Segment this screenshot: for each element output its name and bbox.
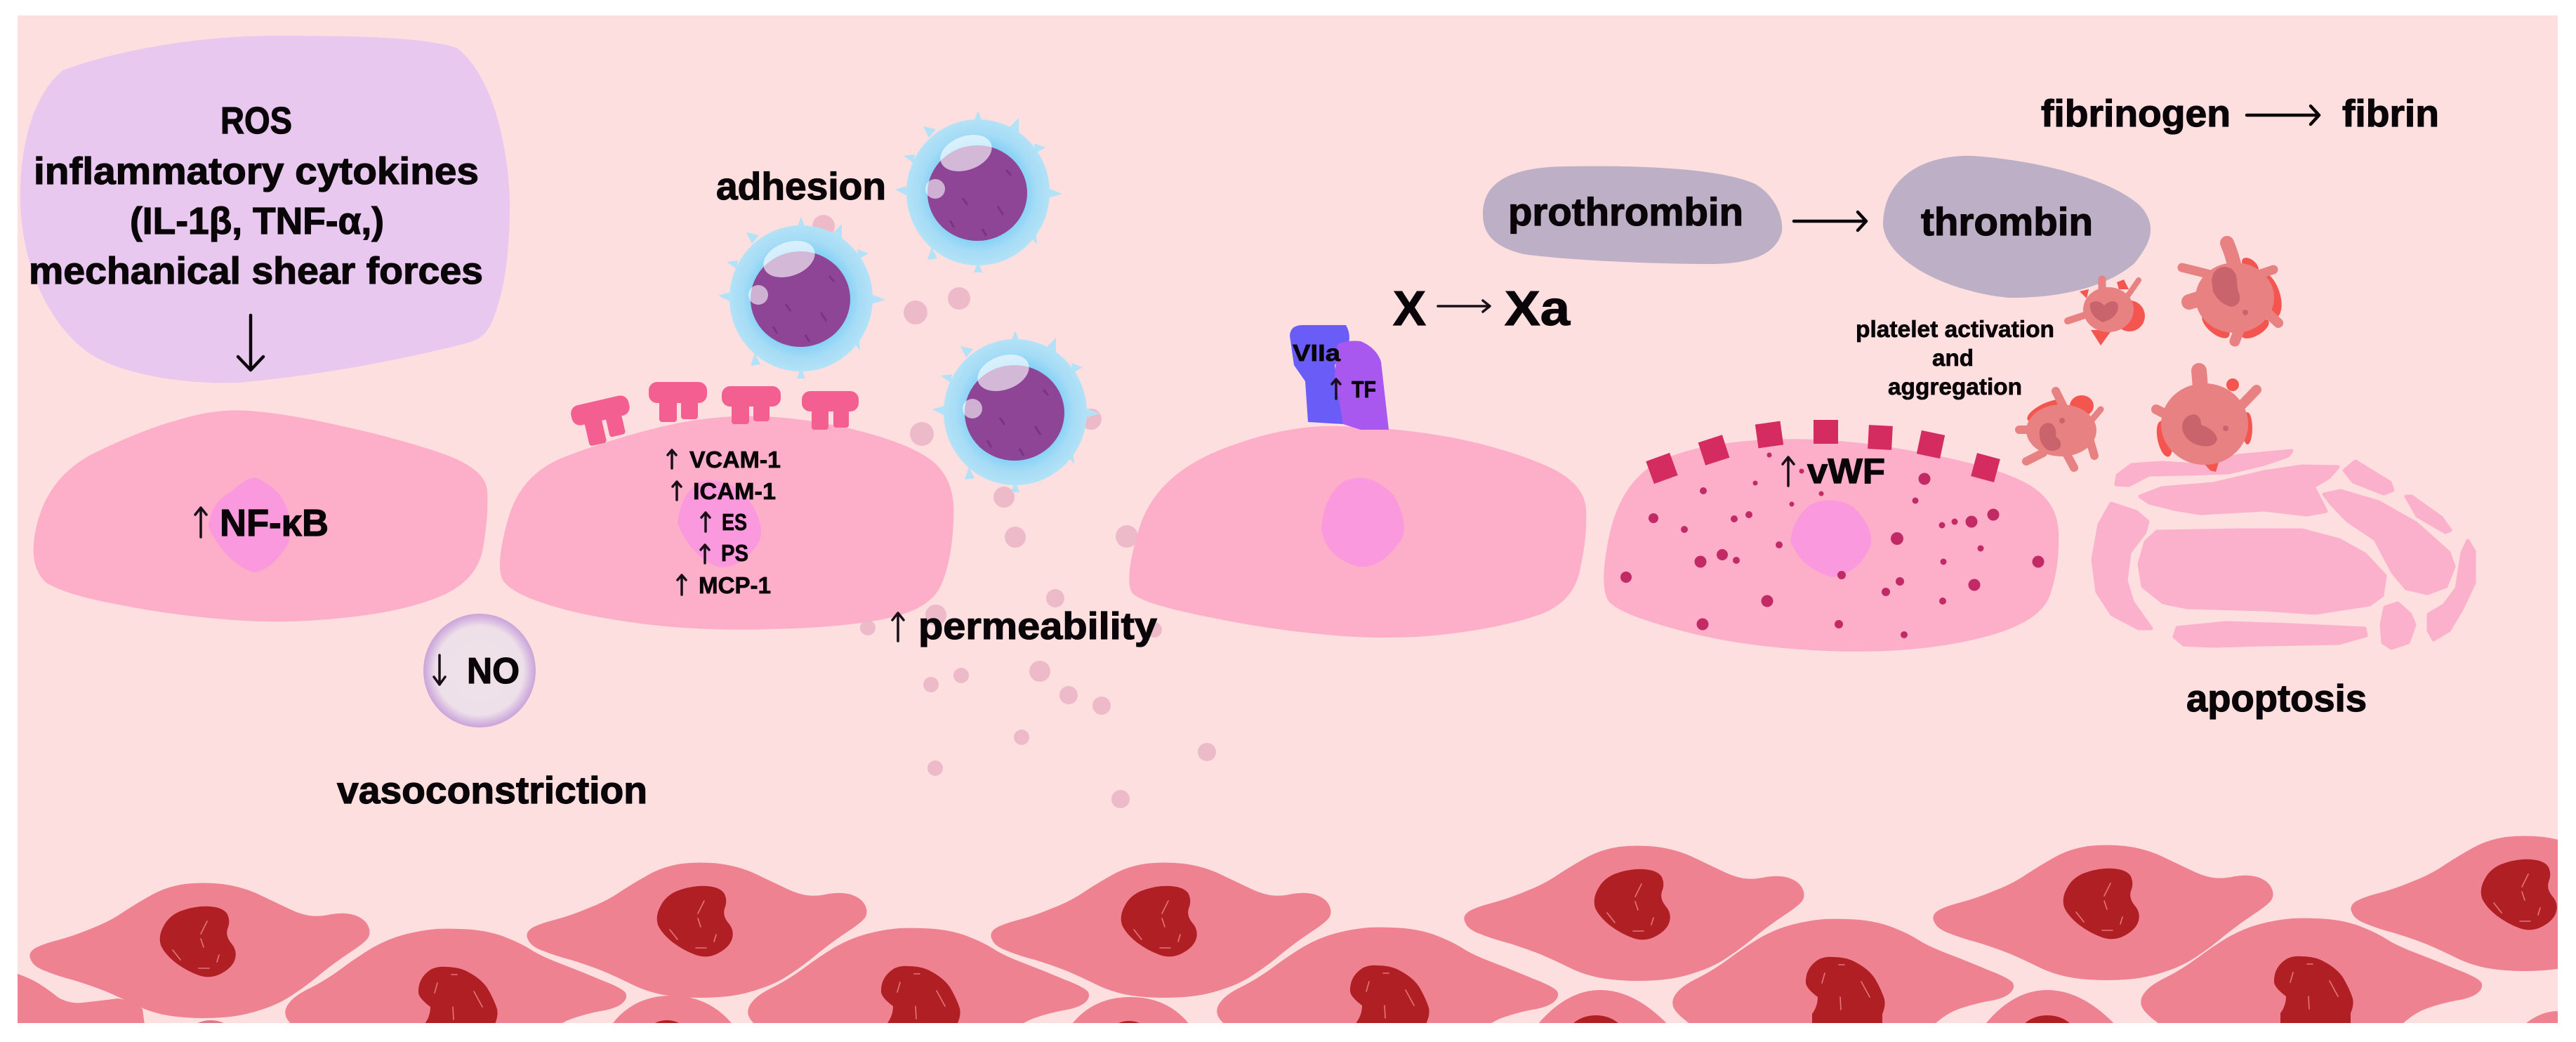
NO vesicle [423,614,536,727]
endothelial cell 1 [34,410,487,621]
leukocyte left [718,217,885,378]
platelet bottom right [2154,371,2257,472]
up arrow [1332,379,1340,399]
stimuli text: inflammatory cytokines [34,150,479,192]
granules [1620,452,2045,638]
adhesion molecule list: PS [721,540,748,566]
adhesion molecule list: ICAM-1 [693,478,776,504]
platelet activation label [1856,316,2054,400]
nucleus [1321,477,1404,567]
factor X activation: Xa [1505,281,1571,336]
VIIa [1290,325,1349,424]
adhesion molecule list [668,447,781,598]
fibrinogen to fibrin: fibrinogen [2041,93,2231,135]
leukocyte top [895,111,1062,272]
apoptosis label: apoptosis [2186,678,2367,720]
adhesion molecule list: VCAM-1 [689,447,781,473]
stimuli text: ROS [220,100,292,142]
stimuli blob [20,36,510,383]
prothrombin blob [1483,166,1782,264]
factor X activation: X [1393,281,1426,336]
adhesion label: adhesion [716,164,886,208]
platelet activation label: and [1932,345,1974,371]
receptor markers [569,382,859,449]
vWF label: vWF [1807,451,1885,491]
up arrow [195,508,206,537]
endothelial cell 4 [1604,420,2059,652]
platelet activation label: aggregation [1888,374,2022,400]
permeability label: permeability [918,605,1157,647]
vWF squares [1646,420,2000,484]
leukocyte lower [932,331,1099,492]
fibrinogen to fibrin [2041,93,2439,135]
stimuli text [29,100,483,292]
smooth muscle cell layer [18,836,2576,1042]
down arrow [434,655,445,685]
label: NF-κB [220,502,329,544]
platelet top left [2068,279,2145,345]
thrombin blob [1883,156,2151,298]
stimuli text: (IL-1β, TNF-α,) [130,200,384,242]
small lower cells [18,974,2558,1023]
endothelial cell 3 [1129,426,1586,638]
vasoconstriction label: vasoconstriction [337,770,647,812]
thrombin blob: thrombin [1921,199,2093,244]
fibrinogen to fibrin: fibrin [2342,93,2439,135]
platelet activation label: platelet activation [1856,316,2054,342]
upper row of cells [29,836,2576,1018]
NO text: NO [467,651,520,692]
platelet top right [2182,243,2287,343]
endothelial cell 2 [500,382,953,630]
adhesion molecule list: MCP-1 [699,572,771,598]
lower row of cells [285,918,2483,1023]
platelet bottom left [2019,391,2101,468]
factor X activation [1393,281,1571,336]
TF label: TF [1352,376,1376,402]
VIIa label: VIIa [1293,340,1341,366]
down arrow [238,315,263,370]
nucleus [209,477,291,572]
nucleus [678,480,761,567]
nucleus [1790,500,1871,577]
apoptotic cell fragments [2093,451,2474,648]
arrow prothrombin to thrombin [1794,212,1866,230]
prothrombin blob: prothrombin [1508,190,1743,234]
TF [1335,341,1389,430]
stimuli text: mechanical shear forces [29,250,483,292]
tissue factor complex [1290,325,1389,430]
adhesion molecule list: ES [722,509,747,535]
extravasation particles [812,215,1216,808]
